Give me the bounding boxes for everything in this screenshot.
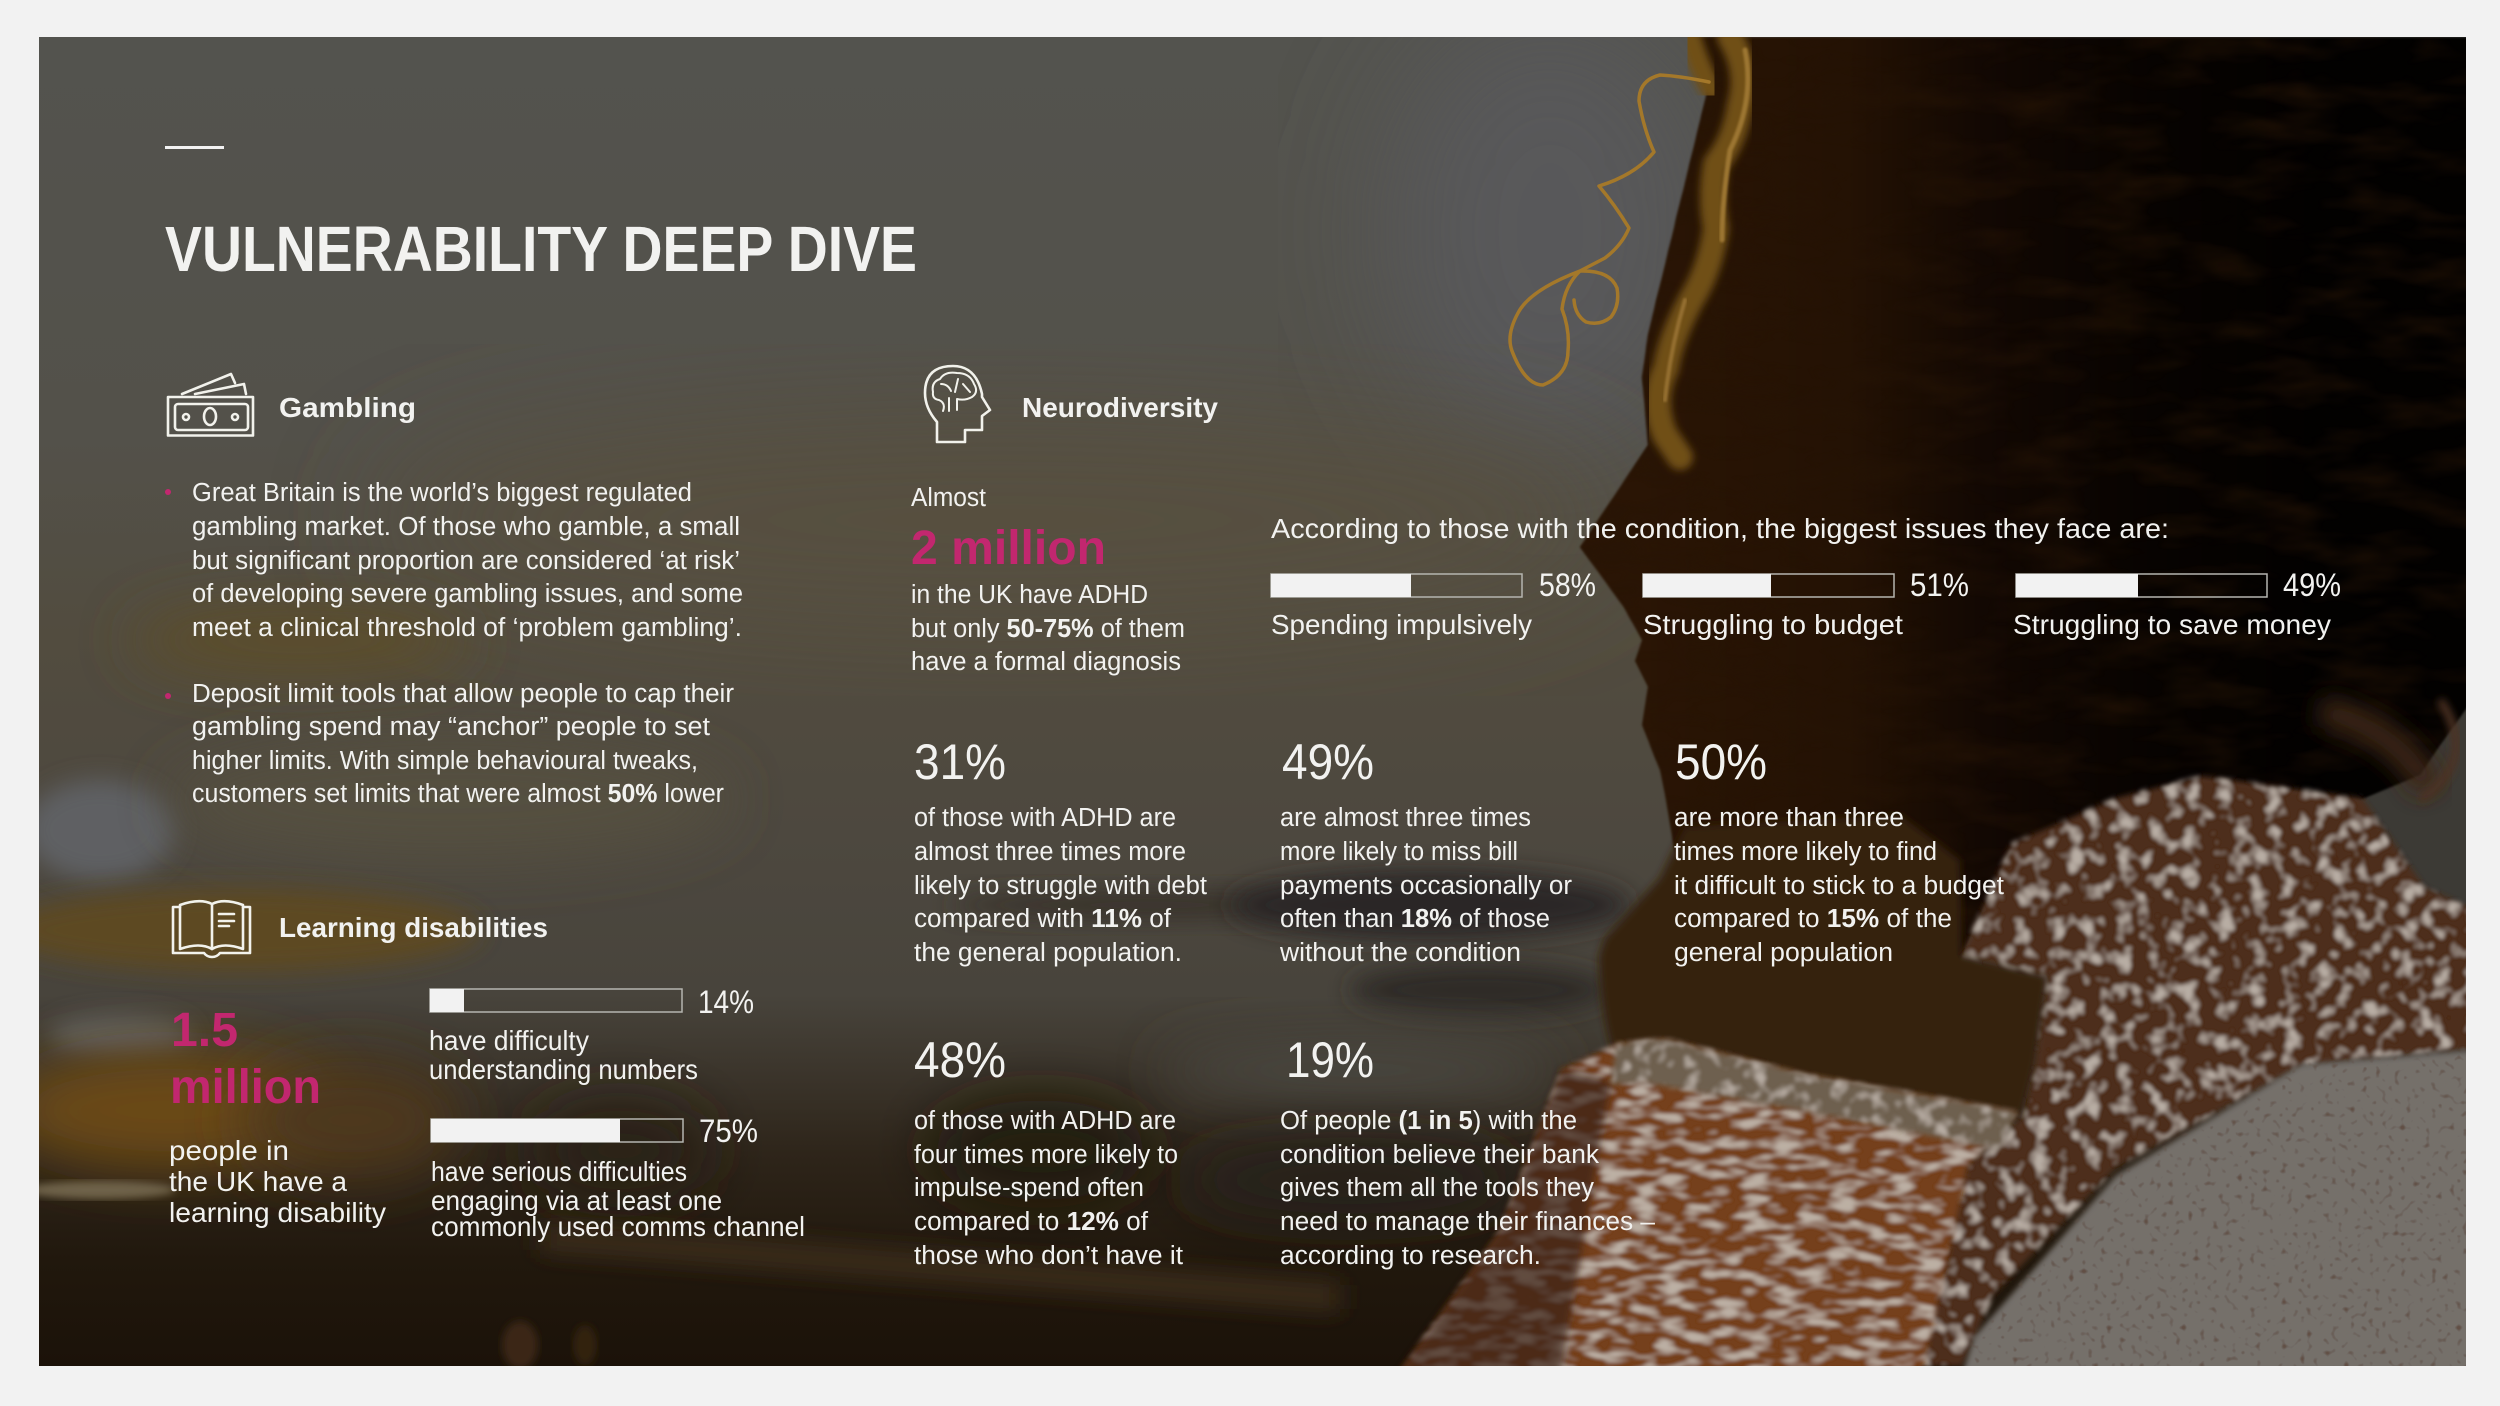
bar: 75 percent: have serious difficulties <box>431 1156 687 1187</box>
text: people in the UK <box>169 1135 386 1228</box>
bar: struggling to save money <box>2013 567 2341 640</box>
stat: 48 percent: impulse-spend often <box>914 1174 1144 1202</box>
bullet paragraph: market: gambling market. Of those who gamble, a small <box>192 513 740 541</box>
stat: 48 percent <box>914 1032 1183 1270</box>
bullet paragraph: deposit limits: Deposit limit tools that allow people to cap their <box>192 680 735 708</box>
bullet paragraph: deposit limits: higher limits. With simple behavioural tweaks, <box>192 747 698 775</box>
bullet paragraph: market: meet a clinical threshold of ‘problem gambling’. <box>192 614 742 642</box>
icon: banknotes <box>168 374 253 436</box>
stat: 50 percent: times more likely to find <box>1674 838 1937 866</box>
stat: 48 percent: 48% <box>914 1032 1006 1088</box>
stat: 19 percent: 19% <box>1286 1032 1374 1088</box>
bar: struggling to save money: Struggling to save money <box>2013 609 2331 640</box>
heading: gambling: Gambling <box>279 392 416 423</box>
stat: 2 million ADHD <box>911 484 1185 676</box>
stat: 50 percent: 50% <box>1675 734 1767 790</box>
stat: 49 percent <box>1279 734 1573 967</box>
bar: struggling to save money: 49% <box>2283 567 2341 603</box>
stat: 19 percent <box>1280 1032 1656 1270</box>
text: people in the UK: the UK have a <box>169 1166 348 1197</box>
stat: 2 million ADHD: but only 50-75% of them <box>911 615 1185 643</box>
stat: 31 percent: 31% <box>914 734 1006 790</box>
icon: head with brain <box>925 366 990 442</box>
text: people in the UK: learning disability <box>169 1197 386 1228</box>
bar: 75 percent <box>431 1113 805 1242</box>
stat: 49 percent: often than 18% of those <box>1280 905 1550 933</box>
bar: struggling to budget: Struggling to budget <box>1643 609 1903 640</box>
hair and face <box>1580 37 2480 1000</box>
stat: 2 million ADHD: have a formal diagnosis <box>911 648 1181 676</box>
stat: 49 percent: without the condition <box>1279 939 1521 967</box>
stat: 1.5 million: 1.5 <box>171 1004 238 1057</box>
stat: 19 percent: condition believe their bank <box>1280 1141 1599 1169</box>
panel: learning disabilities <box>169 901 805 1242</box>
bar: 14 percent: 14% <box>698 984 754 1020</box>
title: VULNERABILITY DEEP DIVE <box>165 213 917 285</box>
bar: struggling to budget: 51% <box>1910 567 1969 603</box>
stat: 1.5 million <box>170 1004 321 1114</box>
stat: 31 percent: the general population. <box>914 939 1182 967</box>
hair strands <box>1510 37 1748 457</box>
bullet paragraph: market: Great Britain is the world’s biggest regulated <box>192 479 692 507</box>
text: people in the UK: people in <box>169 1135 289 1166</box>
stat: 19 percent: Of people (1 in 5) with the <box>1280 1107 1577 1135</box>
sweater <box>1960 1050 2480 1380</box>
bullet paragraph: market <box>165 479 743 642</box>
stat: 50 percent: compared to 15% of the <box>1674 905 1952 933</box>
title dash <box>165 146 224 149</box>
bullet paragraph: market: of developing severe gambling issues, and some <box>192 580 743 608</box>
heading: learning disabilities: Learning disabilities <box>279 912 548 943</box>
panel: neurodiversity <box>911 366 2341 1270</box>
stat: 50 percent: general population <box>1674 939 1893 967</box>
icon: open book <box>173 901 250 957</box>
bar: struggling to budget <box>1643 567 1969 640</box>
bar: 14 percent: understanding numbers <box>429 1054 698 1085</box>
scarf <box>1890 776 2480 1366</box>
bar: 14 percent: have difficulty <box>429 1025 589 1056</box>
bar: spending impulsively <box>1271 567 1596 640</box>
bar: 14 percent <box>429 984 754 1085</box>
bullet paragraph: deposit limits: gambling spend may “anchor” people to set <box>192 713 710 741</box>
stat: 19 percent: gives them all the tools they <box>1280 1174 1594 1202</box>
bullet paragraph: market: but significant proportion are considered ‘at risk’ <box>192 547 740 575</box>
stat: 49 percent: payments occasionally or <box>1280 872 1573 900</box>
stat: 49 percent: are almost three times <box>1280 804 1531 832</box>
stat: 19 percent: need to manage their finances – <box>1280 1208 1656 1236</box>
bullet paragraph: deposit limits <box>165 680 735 808</box>
stat: 2 million ADHD: Almost <box>911 484 986 512</box>
stat: 50 percent <box>1674 734 2004 967</box>
bar: 75 percent: engaging via at least one <box>431 1185 722 1216</box>
stat: 1.5 million: million <box>170 1061 321 1114</box>
stat: 50 percent: are more than three <box>1674 804 1904 832</box>
stat: 19 percent: according to research. <box>1280 1242 1541 1270</box>
hand <box>1599 815 2048 1125</box>
sleeve cuff <box>1394 1039 2017 1380</box>
stat: 49 percent: 49% <box>1282 734 1374 790</box>
stat: 48 percent: those who don’t have it <box>914 1242 1183 1270</box>
heading: neurodiversity: Neurodiversity <box>1022 392 1218 423</box>
bar: spending impulsively: 58% <box>1539 567 1596 603</box>
stat: 31 percent: likely to struggle with debt <box>914 872 1207 900</box>
stat: 31 percent: almost three times more <box>914 838 1186 866</box>
bar: 75 percent: 75% <box>699 1113 758 1149</box>
stat: 31 percent: of those with ADHD are <box>914 804 1176 832</box>
panel: gambling <box>165 374 743 808</box>
stat: 48 percent: of those with ADHD are <box>914 1107 1176 1135</box>
bar: spending impulsively: Spending impulsively <box>1271 609 1532 640</box>
stat: 48 percent: four times more likely to <box>914 1141 1178 1169</box>
bar: 75 percent: commonly used comms channel <box>431 1211 805 1242</box>
intro: biggest issues: According to those with the condition, the biggest issues they face are: <box>1271 513 2169 544</box>
stat: 31 percent: compared with 11% of <box>914 905 1172 933</box>
right sky behind hair <box>2364 709 2466 905</box>
bullet paragraph: deposit limits: customers set limits that were almost 50% lower <box>192 780 724 808</box>
stat: 50 percent: it difficult to stick to a budget <box>1674 872 2004 900</box>
stat: 2 million ADHD: 2 million <box>911 522 1106 575</box>
stat: 2 million ADHD: in the UK have ADHD <box>911 581 1148 609</box>
stat: 31 percent <box>914 734 1207 967</box>
stat: 49 percent: more likely to miss bill <box>1280 838 1518 866</box>
stat: 48 percent: compared to 12% of <box>914 1208 1149 1236</box>
